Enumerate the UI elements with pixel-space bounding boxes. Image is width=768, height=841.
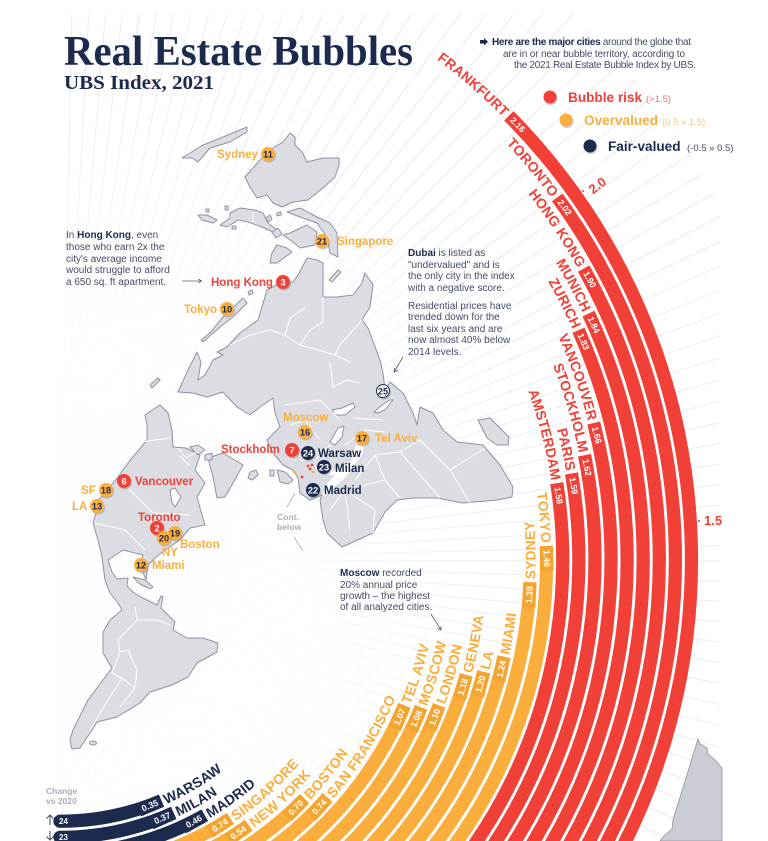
callout: Hong Kong: In Hong Kong, even (66, 230, 158, 241)
band: Sydney: SYDNEY (524, 522, 536, 579)
band: Paris: PARIS (557, 428, 575, 470)
band: London: LONDON (436, 644, 462, 704)
band: Moscow: MOSCOW (418, 640, 446, 706)
band: Vancouver: 1.66 (590, 426, 604, 445)
arrow (394, 357, 403, 372)
pin: Stockholm: Stockholm (221, 444, 280, 456)
band: Amsterdam: AMSTERDAM (528, 392, 561, 480)
band end caps with rank numbers: 24 (59, 817, 68, 826)
callout: Hong Kong (65, 230, 202, 288)
band: Tokyo (449, 492, 554, 841)
band: Warsaw: WARSAW (162, 763, 220, 804)
pin: Warsaw (301, 446, 361, 462)
pin: New York (157, 531, 178, 559)
callout: Dubai: Residential prices have (408, 301, 512, 312)
band: New York: NEW YORK (248, 769, 312, 828)
callout: Moscow: Moscow recorded (340, 568, 422, 579)
pin: Warsaw: Warsaw (318, 448, 361, 460)
pin: Vancouver: 6 (121, 476, 127, 486)
band: Warsaw: 0.35 (140, 798, 160, 813)
callout: Dubai: Dubai is listed as (408, 248, 485, 259)
band: San Francisco (270, 696, 394, 841)
band: Tel Aviv (296, 643, 428, 841)
map: inland seas and gulfs (170, 400, 393, 507)
pin: Tokyo (184, 302, 235, 318)
callout: Dubai: "undervalued" and is (408, 260, 500, 271)
legend: bubble risk: (>1.5) (646, 94, 671, 105)
pin: Singapore: Singapore (337, 236, 393, 248)
pin: San Francisco (81, 483, 114, 498)
pin: Sydney (217, 147, 276, 162)
band: Miami: 1.24 (495, 659, 508, 678)
band: Hong Kong: 1.90 (581, 270, 598, 289)
legend: overvalued (560, 113, 705, 128)
band: Geneva: GENEVA (464, 616, 484, 672)
band: Stockholm: 1.62 (580, 458, 594, 477)
pin: Miami: Miami (152, 560, 185, 572)
change vs 2020 note: Change (46, 786, 77, 796)
band: Munich: 1.84 (586, 315, 602, 335)
pin: Tokyo: 10 (222, 304, 232, 314)
pin: Moscow: 16 (300, 427, 310, 437)
map: Eurasia and Africa (178, 258, 513, 547)
small city dots (294, 464, 314, 478)
band: Tel Aviv: TEL AVIV (401, 643, 428, 702)
note: continued below: Cont. (277, 512, 299, 522)
callout: Dubai: with a negative score. (407, 283, 505, 294)
band: Boston: BOSTON (304, 748, 348, 800)
band: London: 1.10 (427, 707, 442, 727)
band: New York (211, 769, 312, 841)
band: Tokyo: 1.46 (542, 550, 552, 567)
band: Zurich: 1.83 (575, 332, 592, 352)
legend: fair-valued: Fair-valued (608, 139, 681, 154)
band: Milan: MILAN (175, 786, 217, 816)
map: Southeast Asia islands (198, 206, 341, 342)
pin: Vancouver: Vancouver (135, 476, 194, 488)
band: Madrid (118, 780, 254, 841)
pin: Tel Aviv (355, 431, 418, 446)
band: Tokyo: TOKYO (537, 492, 551, 542)
band: LA: LA (480, 652, 494, 670)
pin: Boston: Boston (180, 539, 220, 551)
map: Americas (70, 405, 218, 749)
icon: up arrow (46, 815, 54, 825)
pin: Tel Aviv: Tel Aviv (375, 433, 418, 445)
pin: San Francisco: SF (81, 485, 96, 497)
pin: Toronto (138, 512, 181, 536)
legend: fair-valued: (-0.5 » 0.5) (687, 143, 733, 154)
note: continued below: below (277, 522, 301, 532)
callout: Hong Kong: a 650 sq. ft apartment. (66, 277, 166, 288)
callout: Moscow (340, 568, 441, 630)
band: LA: 1.20 (474, 674, 488, 694)
legend: fair-valued (584, 139, 733, 154)
pin: Hong Kong: 3 (280, 277, 286, 287)
pin: Dubai: 25 (378, 386, 388, 396)
band: Sydney (429, 522, 537, 841)
band: Singapore: SINGAPORE (232, 758, 299, 820)
arrow (182, 279, 202, 283)
band end caps with rank numbers (53, 815, 68, 841)
band: Singapore: 0.74 (210, 816, 230, 834)
band: Sydney: 1.39 (524, 586, 535, 603)
pin: Singapore (315, 234, 393, 250)
band: Moscow: 1.08 (409, 709, 424, 729)
band: Boston (242, 748, 348, 841)
band: Toronto: 2.02 (556, 198, 574, 217)
icon: arrow bullet (480, 38, 488, 46)
band: Geneva (366, 616, 484, 841)
band: Moscow (321, 640, 446, 841)
arrow (431, 614, 441, 630)
band: Munich: MUNICH (556, 258, 591, 312)
band: Singapore (173, 758, 299, 841)
intro text (480, 37, 696, 71)
band: Frankfurt: FRANKFURT (438, 52, 510, 115)
band: Milan: 0.37 (152, 810, 172, 826)
pin: Milan: Milan (335, 463, 364, 475)
band: Milan (60, 786, 217, 841)
legend: bubble risk: Bubble risk (568, 90, 642, 105)
pin: Stockholm: 7 (289, 445, 295, 455)
band: Warsaw (60, 763, 220, 828)
pin: Stockholm (221, 443, 300, 458)
pin: Moscow: Moscow (283, 412, 328, 424)
pin: Warsaw: 24 (303, 448, 314, 458)
map: New Zealand (182, 127, 247, 162)
pin: Miami (134, 558, 185, 574)
band: Miami (408, 613, 516, 841)
pin: Los Angeles (72, 499, 105, 514)
pin: Madrid (306, 483, 362, 498)
callout: Dubai (394, 248, 515, 372)
icon: down arrow (46, 831, 54, 840)
pin: San Francisco: 18 (101, 485, 111, 495)
pin: Singapore: 21 (317, 236, 327, 246)
intro text: Here are the major cities around the globe that (492, 37, 691, 48)
pin: Hong Kong (211, 275, 291, 290)
pin: Tel Aviv: 17 (357, 433, 367, 443)
band: Stockholm: STOCKHOLM (554, 363, 588, 452)
callout: Hong Kong: city's average income (66, 254, 162, 265)
callout: Moscow: 20% annual price (340, 580, 418, 591)
subtitle: UBS Index, 2021 (64, 72, 214, 94)
note: continued below (277, 493, 303, 551)
pin: Los Angeles: 13 (92, 501, 102, 511)
legend: overvalued: (0.5 » 1.5) (662, 117, 705, 128)
legend (544, 90, 733, 154)
pin: Sydney: Sydney (217, 149, 259, 161)
band: Geneva: 1.18 (456, 677, 470, 697)
callout: Dubai: now almost 40% below (408, 335, 511, 346)
callout: Dubai: trended down for the (408, 312, 500, 323)
band: LA (388, 652, 494, 841)
callout: Dubai: last six years and are (408, 324, 503, 335)
pin: New York: 20 (159, 533, 169, 543)
pin: Dubai (376, 384, 391, 400)
band: Hong Kong: HONG KONG (528, 188, 584, 267)
map: rotated world (70, 127, 513, 749)
pin: Milan: 23 (319, 462, 329, 472)
map: Greenland (208, 453, 243, 498)
band: Boston: 0.70 (286, 798, 305, 817)
pin: Milan (317, 460, 364, 476)
callout: Hong Kong: would struggle to afford (65, 265, 170, 276)
band: Tel Aviv: 1.07 (392, 707, 408, 727)
map: country borders (90, 212, 485, 730)
pin: Los Angeles: LA (72, 501, 87, 513)
callout: Hong Kong: those who earn 2x the (66, 242, 165, 253)
title: Real Estate Bubbles (64, 29, 413, 75)
change vs 2020 note: vs 2020 (46, 796, 77, 806)
intro text: are in or near bubble territory, according to (503, 49, 685, 60)
callout: Moscow: growth – the highest (340, 591, 430, 602)
band: Paris: 1.59 (567, 477, 580, 495)
pin: Vancouver (117, 474, 194, 490)
band: London (344, 644, 462, 841)
band: Amsterdam: 1.58 (552, 486, 565, 505)
pin: Miami: 12 (136, 560, 146, 570)
intro text: the 2021 Real Estate Bubble Index by UBS. (514, 60, 696, 71)
band: Madrid: 0.46 (184, 813, 204, 830)
pin: Madrid: Madrid (324, 485, 362, 497)
map: small islands (90, 378, 509, 745)
callout: Dubai: the only city in the index (408, 271, 515, 282)
pin: Tokyo: Tokyo (184, 304, 217, 316)
axis tick: 2.0: 2.0 (586, 174, 609, 197)
pin: Sydney: 11 (263, 149, 273, 159)
band: Frankfurt: 2.16 (508, 115, 527, 134)
pin: Toronto: Toronto (138, 512, 181, 524)
change vs 2020 note (46, 786, 77, 840)
map: Antarctica fragment (660, 739, 722, 841)
band: Vancouver: VANCOUVER (560, 332, 596, 421)
band: Zurich: ZURICH (548, 278, 581, 328)
pin: Boston: 19 (170, 528, 180, 538)
band: Miami: MIAMI (500, 613, 516, 654)
callout: Dubai: 2014 levels. (408, 347, 461, 358)
legend: bubble risk (544, 90, 671, 105)
band: San Francisco: 0.74 (310, 797, 329, 817)
band: San Francisco: SAN FRANCISCO (328, 696, 394, 798)
axis tick: 1.5: 1.5 (704, 513, 722, 528)
band: Madrid: MADRID (206, 780, 254, 818)
band: Toronto: TORONTO (508, 137, 557, 196)
pin: Toronto: 2 (154, 523, 160, 533)
pin: Moscow (283, 412, 328, 440)
map: Australia (245, 133, 339, 207)
pin: Hong Kong: Hong Kong (211, 277, 273, 289)
callout: Moscow: of all analyzed cities. (340, 602, 432, 613)
pin: Boston (168, 526, 220, 551)
legend: overvalued: Overvalued (584, 113, 658, 128)
pin: Madrid: 22 (308, 485, 318, 495)
pin: New York: NY (162, 547, 178, 559)
